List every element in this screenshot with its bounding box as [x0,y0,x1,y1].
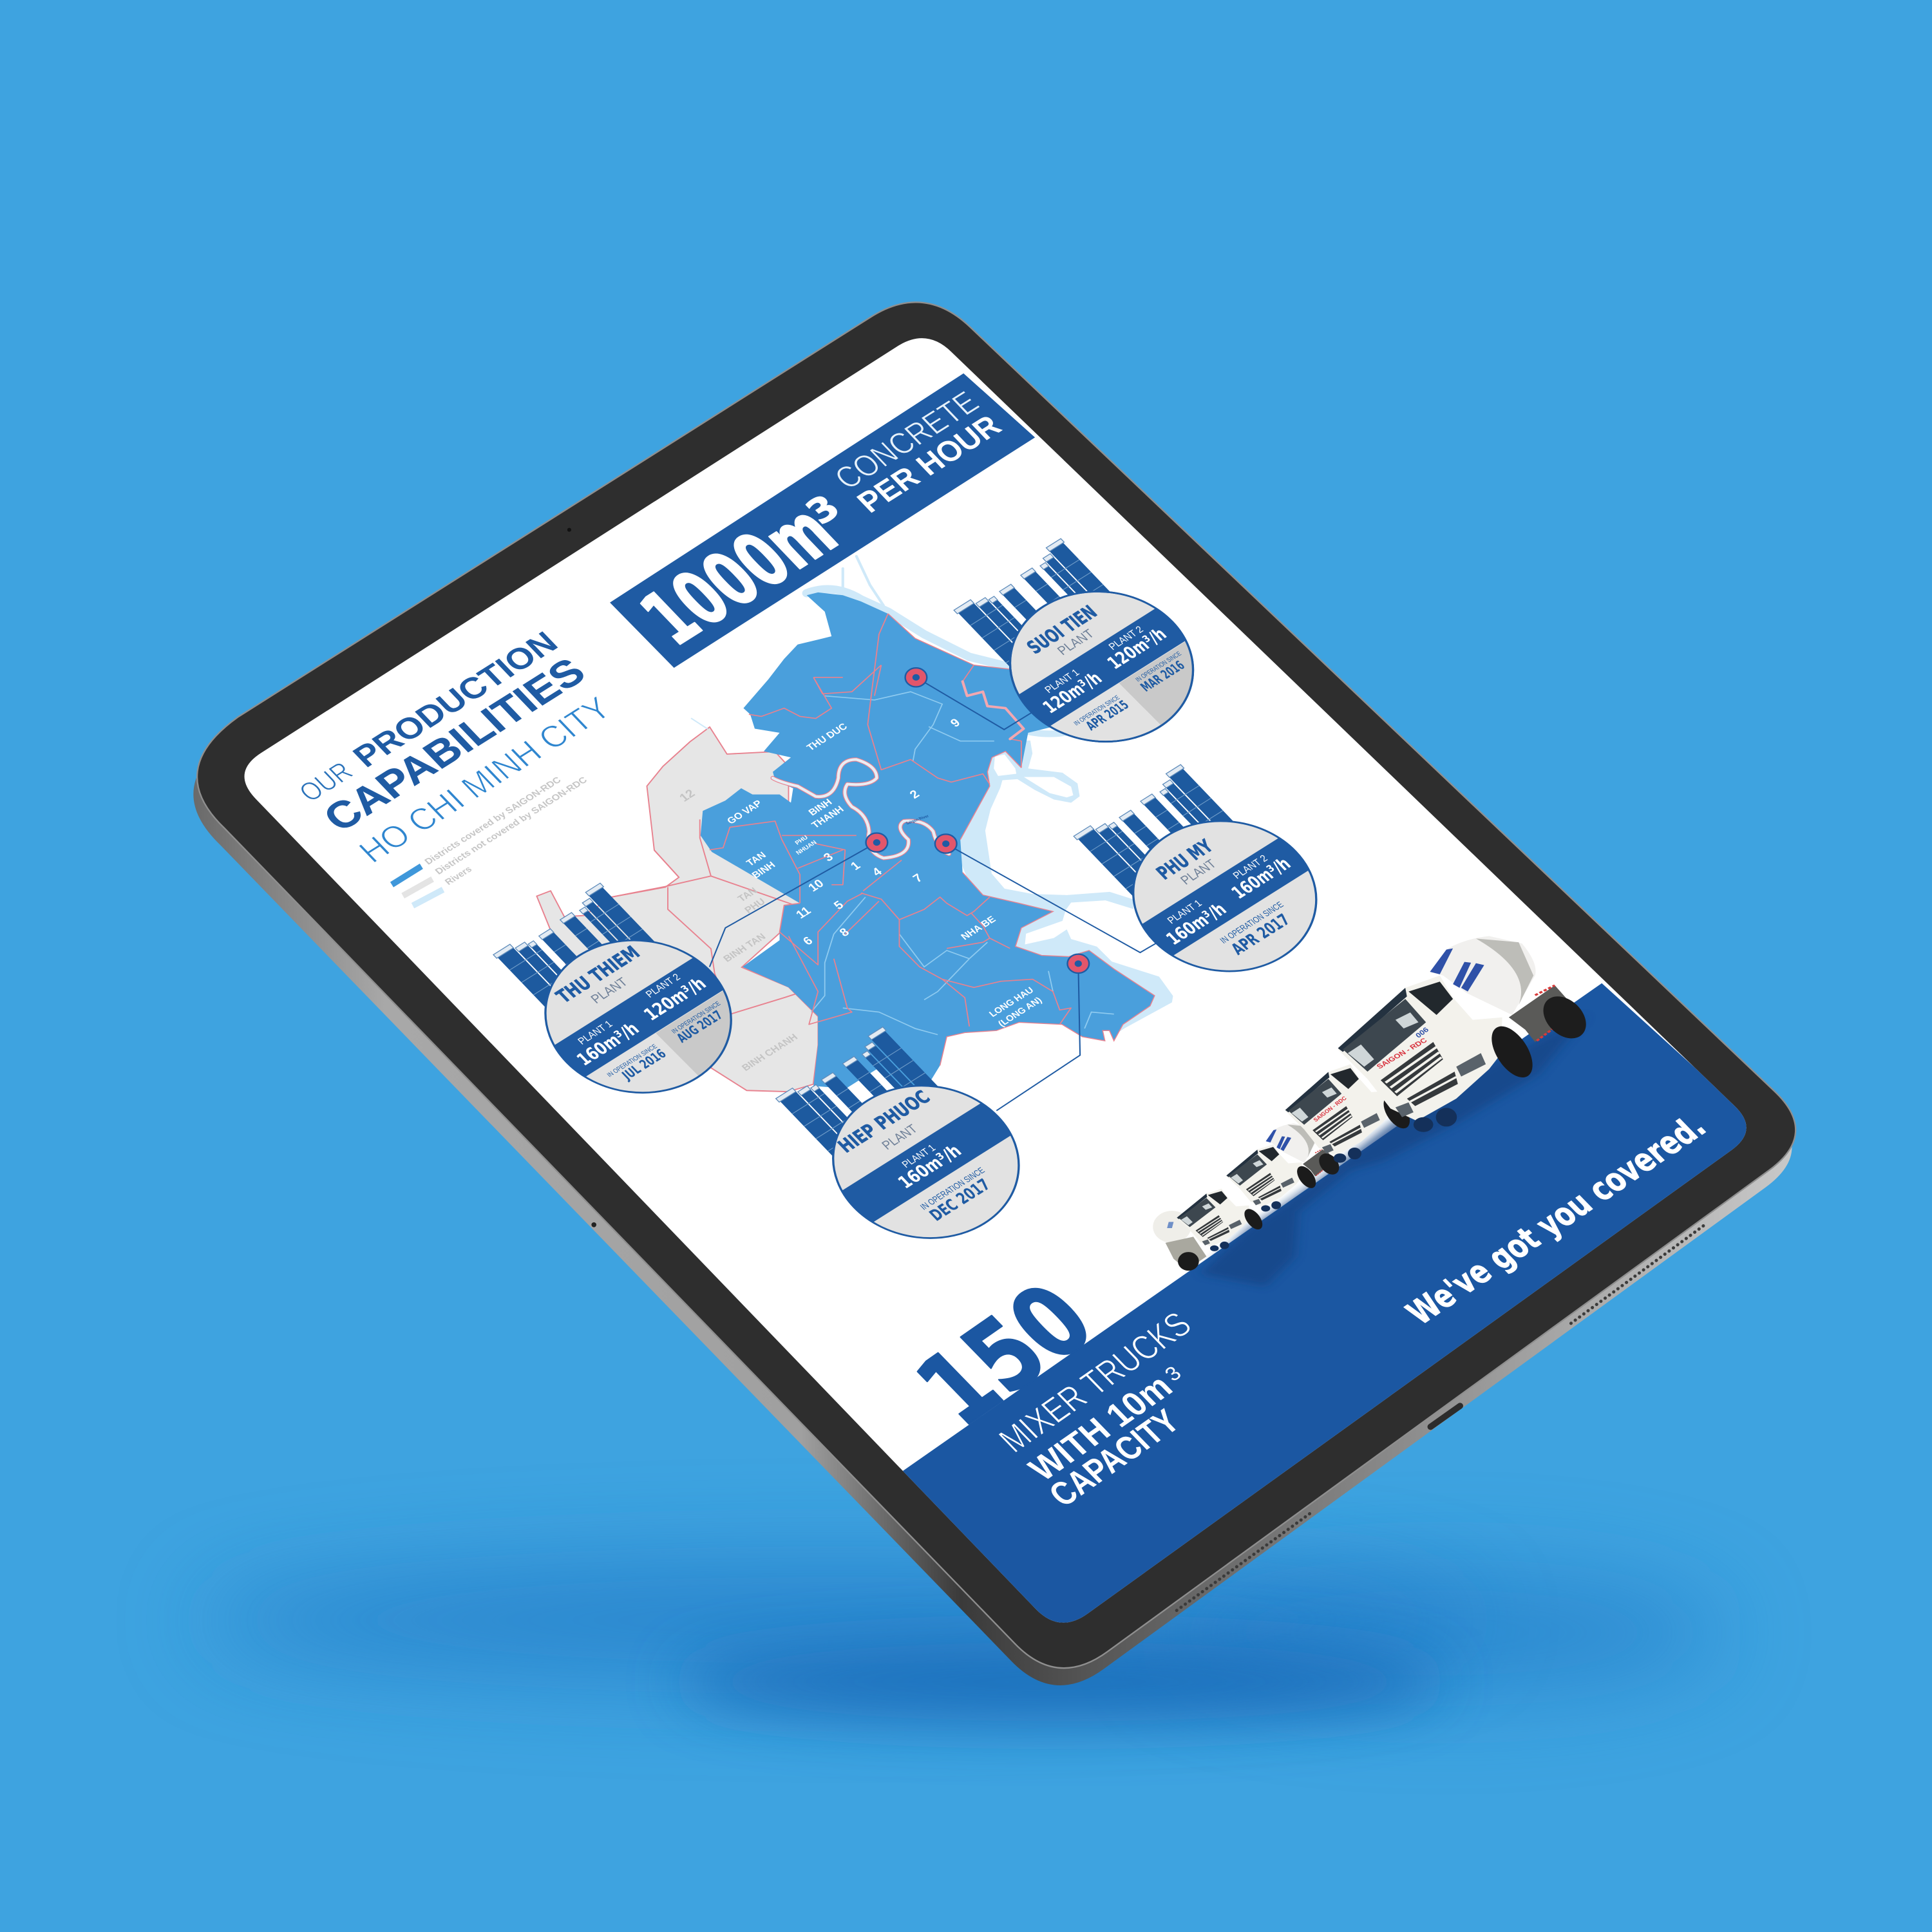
district labels: 2 [907,788,922,801]
district labels: BINH [806,797,835,818]
stat: 150 mixer trucks: 150 [894,1264,1117,1447]
dark bezel [197,302,1795,1668]
callout: Suoi Tien plant: PLANT 2 [1106,624,1146,652]
callout: Phu My plant: 160m³/h [1161,899,1231,949]
district labels: 6 [800,934,816,948]
district labels: 10 [806,877,827,895]
page content clipped to screen [610,374,1774,1651]
callout: Phu My plant: 160m³/h [1227,853,1295,903]
silos [951,538,1135,685]
rivers [692,556,1074,734]
connector lines [710,677,1158,1111]
callout: Suoi Tien plant: IN OPERATION SINCE [1134,650,1183,683]
silos [491,883,671,1026]
legend: Districts covered by SAIGON-RDC [423,775,564,867]
stat: 150 mixer trucks: CAPACITY [1041,1402,1187,1513]
callout: Suoi Tien plant: MAR 2016 [1137,658,1188,694]
headline 1000m3: 3 [797,488,849,532]
stat: 150 mixer trucks: WITH 10m [1021,1367,1180,1488]
district labels: TAN [735,886,760,904]
callout: Suoi Tien plant [939,526,1230,772]
callout: Hiep Phuoc plant: DEC 2017 [925,1175,995,1225]
plant stats: PLANT 1 [900,1142,938,1170]
stat: 150 mixer trucks: 3 [1160,1361,1186,1385]
plant pins [866,668,1089,973]
camera dot [567,528,571,532]
callout: Phu My plant: PLANT 2 [1231,853,1270,881]
callout: Suoi Tien plant: 120m³/h [1103,624,1171,673]
plant name: SUOI TIEN [1023,602,1102,658]
plant stats: PLANT 1 [1165,898,1204,926]
callout: Suoi Tien plant: APR 2015 [1083,697,1132,733]
title [293,625,619,869]
plant disc [1096,791,1354,1001]
top banner [610,374,1035,668]
stat: 150 mixer trucks: MIXER TRUCKS [991,1305,1200,1460]
estuary [953,741,1173,1032]
plant disc [973,562,1230,772]
speaker grille [1177,1224,1707,1611]
coast line [888,614,1155,1065]
district labels: 11 [793,904,814,922]
headline 1000m3: CONCRETE [827,384,986,495]
district labels: BINH [750,860,778,880]
district labels: NHA BE [959,914,998,942]
callout: Hiep Phuoc plant: PLANT [879,1122,921,1153]
callout: Thu Thiem plant: PLANT 2 [643,972,683,999]
callout: Thu Thiem plant [472,873,769,1123]
callout: Thu Thiem plant: AUG 2017 [673,1007,726,1045]
callout: Thu Thiem plant: 120m³/h [639,973,710,1025]
district labels: Saigon River [905,814,931,826]
district labels: GO VAP [725,799,764,826]
district labels: NHUAN [795,839,819,857]
plant disc [795,1056,1057,1269]
side button dot [591,1222,596,1227]
district labels: 8 [837,926,853,940]
district labels: BINH CHANH [740,1032,800,1073]
callout: Suoi Tien plant: 120m³/h [1038,668,1106,717]
operation dates: IN OPERATION SINCE [605,1043,659,1079]
title line 2: CAPABILITIES [314,650,594,839]
callout: Thu Thiem plant: JUL 2016 [618,1046,669,1083]
callout: Hiep Phuoc plant [757,1016,1057,1269]
plant name: THU THIEM [552,942,645,1007]
silos [773,1027,957,1173]
non-covered districts [536,727,818,1092]
district labels: 12 [677,788,698,804]
saigon river [773,681,1023,858]
usb port [1430,1406,1460,1427]
district labels: PHU [743,896,768,916]
truck 1: 006 [1414,1025,1431,1039]
mixer trucks photo [1153,936,1595,1271]
district labels: LONG HAU [987,985,1036,1019]
screen page [245,338,1747,1623]
title line 1: OUR [293,757,359,808]
district labels: TAN [744,850,768,868]
truck 3 [1226,1123,1343,1211]
district labels: THANH [810,804,846,830]
truck 2: SAIGON - RDC [1312,1095,1348,1123]
plant stats: PLANT 1 [576,1019,615,1046]
callout: Phu My plant [1059,752,1354,1001]
callout: Phu My plant: APR 2017 [1227,911,1294,959]
covered districts [701,592,1155,1090]
truck 1 [1338,936,1595,1132]
bottom blue band [901,983,1774,1651]
callout: Thu Thiem plant: PLANT [588,975,630,1007]
district labels: PHU [793,835,810,846]
stat: 150 mixer trucks [894,1264,1200,1513]
map [536,556,1173,1111]
truck 4 [1153,1189,1266,1271]
callout: Thu Thiem plant: IN OPERATION SINCE [670,1000,723,1035]
callout: Thu Thiem plant: 160m³/h [572,1018,643,1070]
metal rim [193,319,1792,1685]
district labels: 1 [848,859,864,873]
district labels: BINH TAN [721,932,768,964]
district labels: 4 [870,866,885,879]
plant stats: PLANT 1 [1043,667,1082,696]
legend: Rivers [443,865,474,887]
callout: Phu My plant: PLANT [1178,857,1219,887]
district labels [677,717,1045,1073]
plant name: PHU MY [1152,836,1218,884]
inner rivers [811,692,1114,1035]
callout: Suoi Tien plant: PLANT [1055,627,1097,658]
tablet device [193,302,1795,1685]
plant name: HIEP PHUOC [834,1087,935,1157]
district labels: 7 [911,872,925,885]
operation dates: IN OPERATION SINCE [918,1166,987,1212]
legend [392,775,590,905]
headline 1000m3: 1000m [623,488,855,661]
legend: Districts not covered by SAIGON-RDC [433,775,590,876]
district labels: 3 [821,851,836,864]
title line 1 [293,625,565,808]
silos [1071,764,1255,911]
district boundaries [710,614,1071,1027]
operation dates: IN OPERATION SINCE [1072,694,1121,727]
callout: Hiep Phuoc plant: 160m³/h [893,1141,966,1193]
truck shadow [1200,1031,1570,1286]
headline 1000m3: PER HOUR [850,409,1009,519]
tablet shadow [197,1561,1725,1721]
pin centres [873,674,1082,967]
title line 3: HO CHI MINH CITY [352,690,619,869]
district labels: THU DUC [805,721,849,753]
plant disc [507,910,769,1123]
operation dates: IN OPERATION SINCE [1218,900,1286,945]
truck 2 [1285,1064,1415,1163]
district labels: (LONG AN) [996,996,1045,1029]
district labels: 9 [948,717,963,730]
title line 1: PRODUCTION [345,625,565,773]
tagline: We've got you covered. [1398,1108,1714,1332]
truck 1: SAIGON - RDC [1375,1036,1429,1070]
district labels: 5 [831,899,847,913]
